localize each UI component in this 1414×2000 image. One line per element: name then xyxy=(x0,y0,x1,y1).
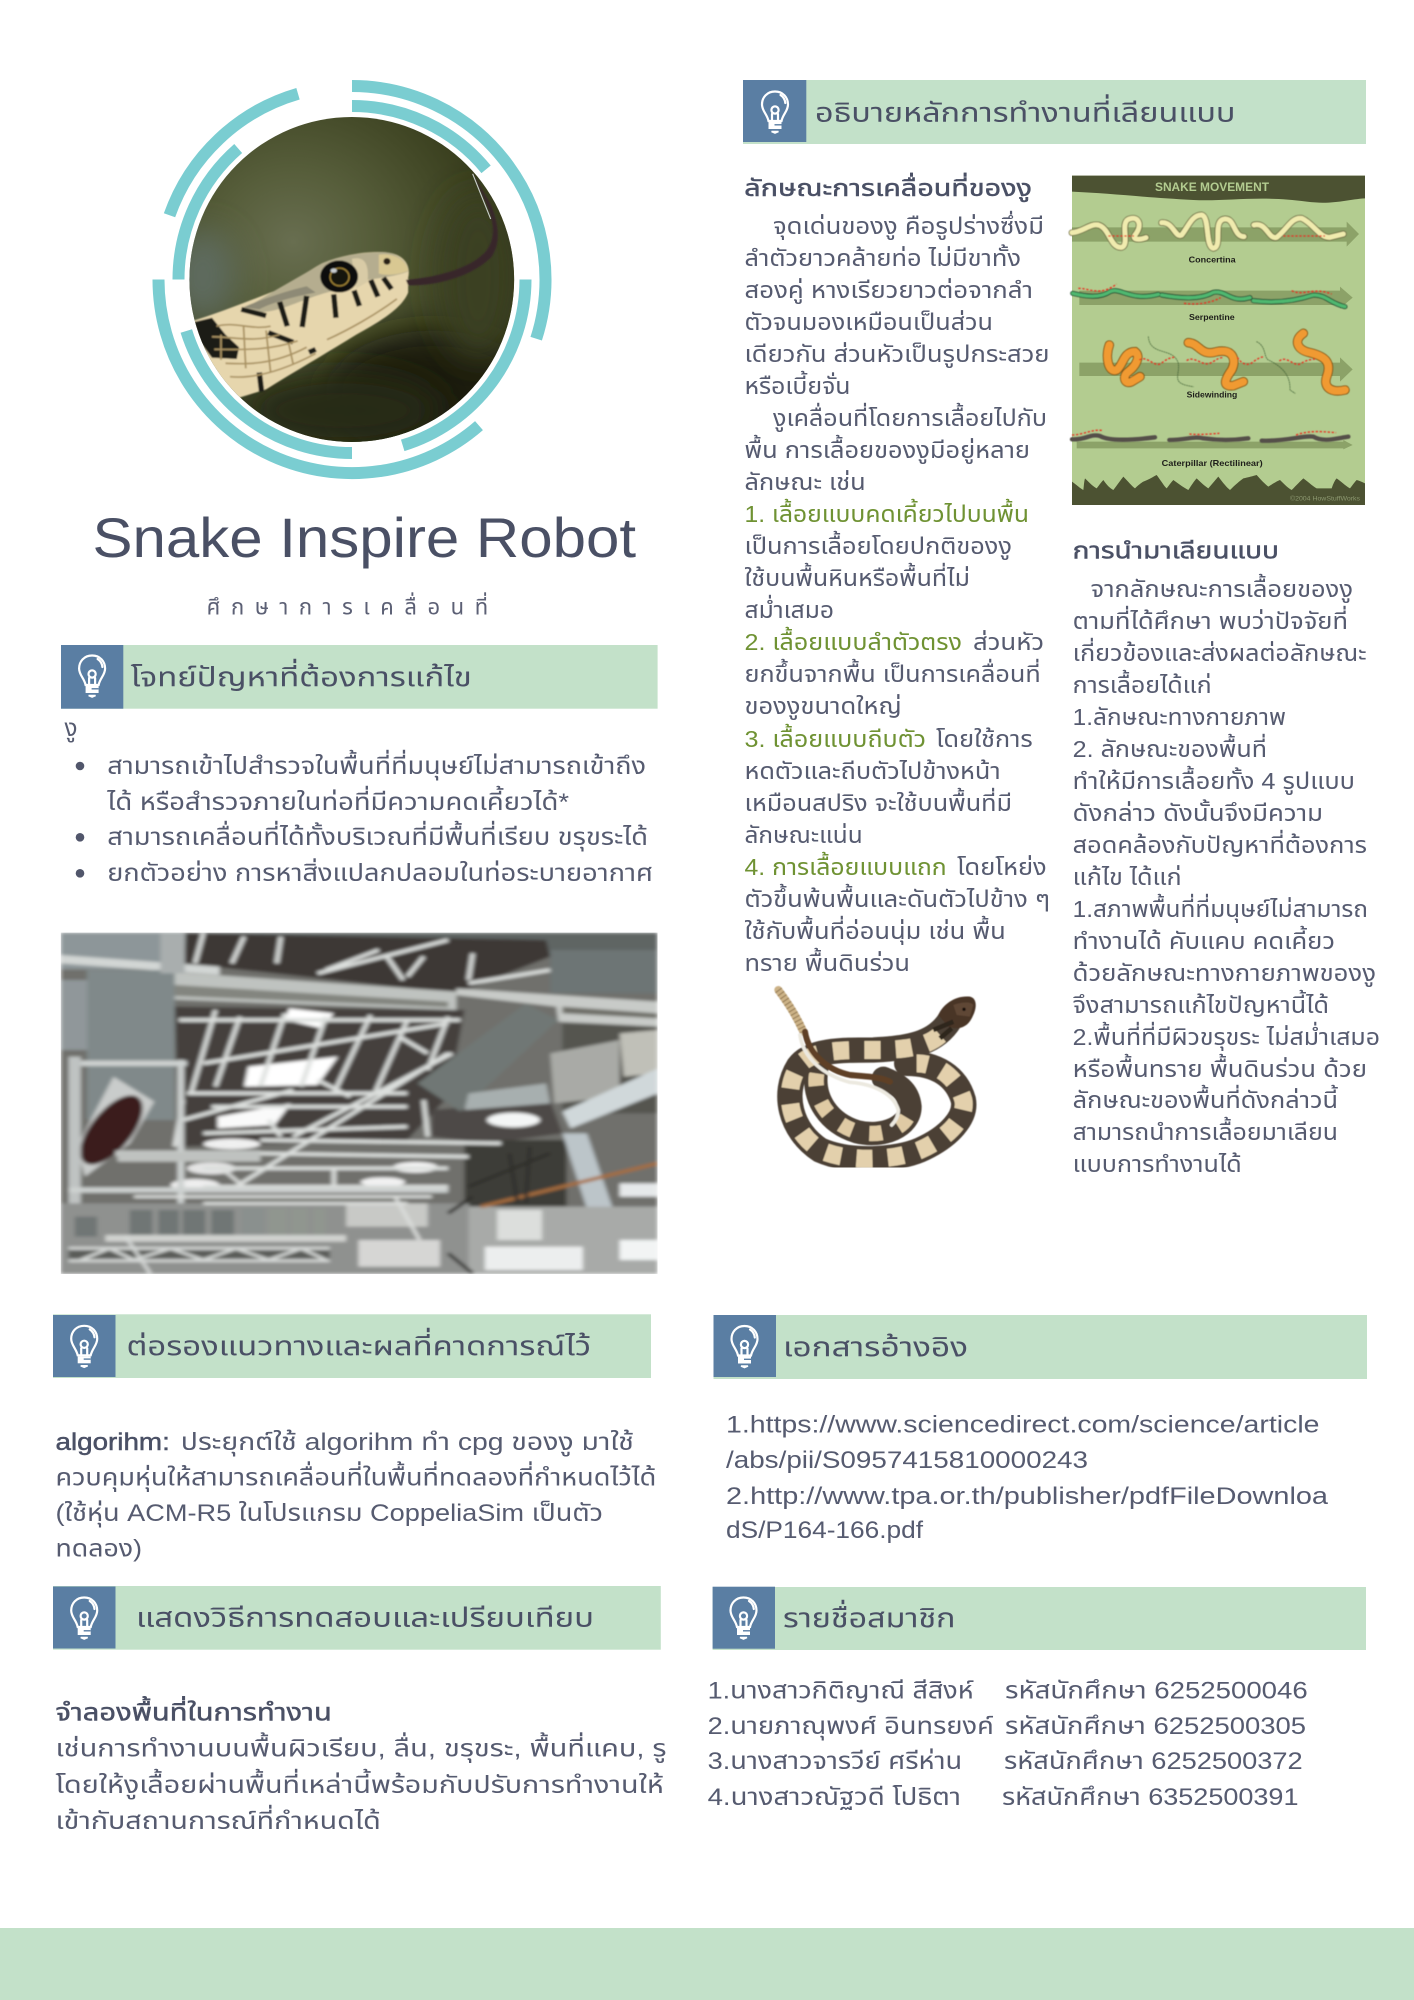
text block: snake movement description: หรือเบี้ยจั่น xyxy=(744,370,850,399)
text block: members and student ids: 2.นายภาณุพงศ์ อินทรยงค์ xyxy=(708,1713,994,1741)
text block: algorithm plan: algorihm: xyxy=(56,1429,170,1456)
text block: problem description: สามารถเข้าไปสำรวจในพื้นที่ที่มนุษย์ไม่สามารถเข้าถึง xyxy=(107,749,646,781)
text block: reference list: 1.https://www.sciencedirect.com/science/article xyxy=(726,1412,1320,1439)
footer band xyxy=(0,1928,1414,2000)
text block: work area simulation: เช่นการทำงานบนพื้นผิวเรียบ, ลื่น, ขรุขระ, พื้นที่แคบ, รู xyxy=(56,1732,666,1764)
section header: references xyxy=(714,1315,1367,1379)
text block: snake movement description: ลำตัวยาวคล้ายท่อ ไม่มีขาทั้ง xyxy=(744,243,1021,271)
text block: algorithm plan: ประยุกต์ใช้ algorihm ทำ cpg ของงู มาใช้ xyxy=(181,1429,634,1457)
text block: imitation explanation: จึงสามารถแก้ไขปัญหานี้ได้ xyxy=(1073,989,1329,1018)
text block: snake movement description: 4. การเลื้อยแบบแถก xyxy=(744,851,947,880)
text block: imitation explanation: 2. ลักษณะของพื้นที่ xyxy=(1073,733,1267,762)
icon: light bulb xyxy=(71,1598,97,1639)
section header: problem: โจทย์ปัญหาที่ต้องการแก้ไข xyxy=(131,658,472,692)
icon: light bulb xyxy=(71,1326,97,1367)
subtitle: ศึกษาการเคลื่อนที่ xyxy=(207,592,488,620)
text block: members and student ids xyxy=(708,1677,1308,1811)
text block: members and student ids: 4.นางสาวณัฐวดี โปธิตา xyxy=(708,1784,961,1811)
text block: snake movement description: สม่ำเสมอ xyxy=(744,594,834,623)
text block: problem description: ยกตัวอย่าง การหาสิ่งแปลกปลอมในท่อระบายอากาศ xyxy=(107,857,653,887)
text block: algorithm plan: ควบคุมหุ่นให้สามารถเคลื่อนที่ในพื้นที่ทดลองที่กำหนดไว้ได้ xyxy=(56,1460,656,1492)
text block: members and student ids: 3.นางสาวจารวีย์ ศรีห่าน xyxy=(708,1747,962,1775)
text block: algorithm plan: (ใช้หุ่น ACM-R5 ในโปรแกรม CoppeliaSim เป็นตัว xyxy=(56,1499,603,1528)
text block: reference list: 2.http://www.tpa.or.th/publisher/pdfFileDownloa xyxy=(726,1483,1329,1510)
text block: snake movement description: เหมือนสปริง จะใช้บนพื้นที่มี xyxy=(744,787,1012,816)
icon: light bulb xyxy=(762,92,788,133)
illustration: snake movement diagram: ©2004 HowStuffWorks xyxy=(1290,496,1360,503)
illustration: snake movement diagram: SNAKE MOVEMENT xyxy=(1155,180,1269,194)
text block: snake movement description: พื้น การเลื้อยของงูมีอยู่หลาย xyxy=(744,434,1030,465)
text block: imitation explanation: ด้วยลักษณะทางกายภาพของงู xyxy=(1073,960,1376,988)
section header: expected guideline and results xyxy=(53,1314,651,1378)
text block: snake movement description: สองคู่ หางเรียวยาวต่อจากลำ xyxy=(744,277,1033,305)
text block: work area simulation: โดยให้งูเลื้อยผ่านพื้นที่เหล่านี้พร้อมกับปรับการทำงานให้ xyxy=(56,1768,664,1800)
text block: imitation explanation: ทำให้มีการเลื้อยทั้ง 4 รูปแบบ xyxy=(1073,765,1355,796)
section header: problem xyxy=(61,645,658,709)
text block: snake movement description: โดยใช้การ xyxy=(936,726,1033,752)
text block: members and student ids: 1.นางสาวกิติญาณี สีสิงห์ xyxy=(708,1677,974,1704)
text block: work area simulation: จำลองพื้นที่ในการทำงาน xyxy=(56,1696,332,1727)
text block: reference list: /abs/pii/S0957415810000243 xyxy=(726,1447,1088,1474)
text block: reference list: dS/P164-166.pdf xyxy=(726,1517,923,1544)
text block: problem description: ได้ หรือสำรวจภายในท่อที่มีความคดเคี้ยวได้* xyxy=(106,785,569,816)
text block: snake movement description: โดยโหย่ง xyxy=(957,854,1047,880)
text block: imitation explanation: ทำงานได้ คับแคบ คดเคี้ยว xyxy=(1073,925,1335,954)
icon: light bulb xyxy=(732,1326,758,1368)
section header: member list: รายชื่อสมาชิก xyxy=(783,1599,956,1633)
text block: snake movement description: หดตัวและถีบตัวไปข้างหน้า xyxy=(744,758,1001,784)
icon: light bulb xyxy=(79,656,105,697)
section header: member list xyxy=(713,1587,1366,1650)
illustration: snake movement diagram: Caterpillar (Rectilinear) xyxy=(1162,458,1263,468)
title: Snake Inspire Robot xyxy=(92,506,636,569)
text block: imitation explanation: สามารถนำการเลื้อยมาเลียน xyxy=(1073,1116,1338,1145)
text block: algorithm plan xyxy=(56,1429,656,1562)
text block: imitation explanation: ดังกล่าว ดังนั้นจึงมีความ xyxy=(1073,798,1323,826)
icon: light bulb xyxy=(730,1598,756,1639)
text block: snake movement description: 3. เลื้อยแบบถีบตัว xyxy=(744,723,926,752)
text block: work area simulation xyxy=(56,1696,666,1835)
illustration: snake movement diagram: Concertina xyxy=(1189,254,1236,264)
section header: working principle xyxy=(743,80,1366,144)
section header: working principle: อธิบายหลักการทำงานที่เลียนแบบ xyxy=(815,94,1236,128)
text block: imitation explanation: สอดคล้องกับปัญหาที่ต้องการ xyxy=(1073,829,1367,858)
illustration: snake movement diagram xyxy=(1072,176,1365,505)
section header: expected guideline and results: ต่อรองแนวทางและผลที่คาดการณ์ไว้ xyxy=(126,1327,591,1361)
illustration: snake movement diagram: Serpentine xyxy=(1189,312,1235,322)
text block: imitation explanation: แบบการทำงานได้ xyxy=(1073,1151,1242,1177)
section header: test and compare method xyxy=(53,1586,661,1650)
text block: imitation explanation xyxy=(1073,573,1380,1177)
heading: snake movement characteristics: ลักษณะการเคลื่อนที่ของงู xyxy=(744,172,1032,203)
text block: snake movement description: ยกขึ้นจากพื้น เป็นการเคลื่อนที่ xyxy=(744,658,1041,687)
text block: imitation explanation: จากลักษณะการเลื้อยของงู xyxy=(1091,573,1353,604)
text block: problem description: งู xyxy=(64,715,78,743)
text block: members and student ids: รหัสนักศึกษา 6252500372 xyxy=(1004,1748,1303,1775)
text block: imitation explanation: แก้ไข ได้แก่ xyxy=(1073,864,1182,890)
text block: snake movement description: ลักษณะแน่น xyxy=(744,822,863,848)
text block: snake movement description: ส่วนหัว xyxy=(973,629,1044,655)
text block: snake movement description: ใช้บนพื้นหินหรือพื้นที่ไม่ xyxy=(744,562,970,591)
text block: imitation explanation: 1.ลักษณะทางกายภาพ xyxy=(1073,704,1286,730)
text block: snake movement description: ตัวขึ้นพ้นพื้นและดันตัวไปข้าง ๆ xyxy=(744,883,1050,912)
text block: snake movement description: เดียวกัน ส่วนหัวเป็นรูปกระสวย xyxy=(744,341,1050,369)
text block: algorithm plan: ทดลอง) xyxy=(56,1536,142,1562)
text block: imitation explanation: ตามที่ได้ศึกษา พบว่าปัจจัยที่ xyxy=(1073,605,1348,634)
text block: members and student ids: รหัสนักศึกษา 6352500391 xyxy=(1002,1784,1298,1811)
icon: ring arcs around snake photo xyxy=(158,86,545,473)
text block: problem description xyxy=(64,715,653,887)
text block: problem description: สามารถเคลื่อนที่ได้ทั้งบริเวณที่มีพื้นที่เรียบ ขรุขระได้ xyxy=(107,820,648,852)
text block: imitation explanation: ลักษณะของพื้นที่ดังกล่าวนี้ xyxy=(1073,1084,1338,1113)
illustration: coiled rattlesnake xyxy=(778,990,976,1159)
text block: snake movement description: งูเคลื่อนที่โดยการเลื้อยไปกับ xyxy=(773,402,1047,433)
text block: snake movement description: ลักษณะ เช่น xyxy=(744,469,866,495)
photo: snake head in circle xyxy=(189,117,514,442)
text block: imitation explanation: 2.พื้นที่ที่มีผิวขรุขระ ไม่สม่ำเสมอ xyxy=(1073,1021,1380,1051)
text block: snake movement description: 1. เลื้อยแบบคดเคี้ยวไปบนพื้น xyxy=(744,498,1029,527)
text block: snake movement description: ใช้กับพื้นที่อ่อนนุ่ม เช่น พื้น xyxy=(744,915,1006,945)
section header: test and compare method: แสดงวิธีการทดสอบและเปรียบเทียบ xyxy=(136,1603,594,1633)
text block: members and student ids: รหัสนักศึกษา 6252500046 xyxy=(1005,1677,1308,1704)
illustration: snake movement diagram: Sidewinding xyxy=(1187,389,1237,399)
text block: snake movement description: จุดเด่นของงู คือรูปร่างซึ่งมี xyxy=(773,210,1044,241)
text block: imitation explanation: หรือพื้นทราย พื้นดินร่วน ด้วย xyxy=(1073,1053,1367,1082)
text block: snake movement description: 2. เลื้อยแบบลำตัวตรง xyxy=(744,626,962,655)
photo: factory ceiling with ducts xyxy=(61,933,658,1274)
text block: members and student ids: รหัสนักศึกษา 6252500305 xyxy=(1005,1713,1306,1740)
text block: imitation explanation: 1.สภาพพื้นที่ที่มนุษย์ไม่สามารถ xyxy=(1073,893,1368,923)
text block: snake movement description: ทราย พื้นดินร่วน xyxy=(744,947,910,976)
section header: references: เอกสารอ้างอิง xyxy=(783,1332,968,1362)
heading: how it is imitated: การนำมาเลียนแบบ xyxy=(1073,538,1279,564)
text block: reference list xyxy=(726,1412,1329,1544)
text block: work area simulation: เข้ากับสถานการณ์ที่กำหนดได้ xyxy=(56,1804,381,1835)
text block: snake movement description: ตัวจนมองเหมือนเป็นส่วน xyxy=(744,309,993,335)
text block: snake movement description xyxy=(744,210,1050,976)
text block: imitation explanation: เกี่ยวข้องและส่งผลต่อลักษณะ xyxy=(1073,637,1367,666)
text block: imitation explanation: การเลื้อยได้แก่ xyxy=(1073,669,1212,698)
text block: snake movement description: ของงูขนาดใหญ่ xyxy=(744,693,902,721)
text block: snake movement description: เป็นการเลื้อยโดยปกติของงู xyxy=(744,530,1012,561)
